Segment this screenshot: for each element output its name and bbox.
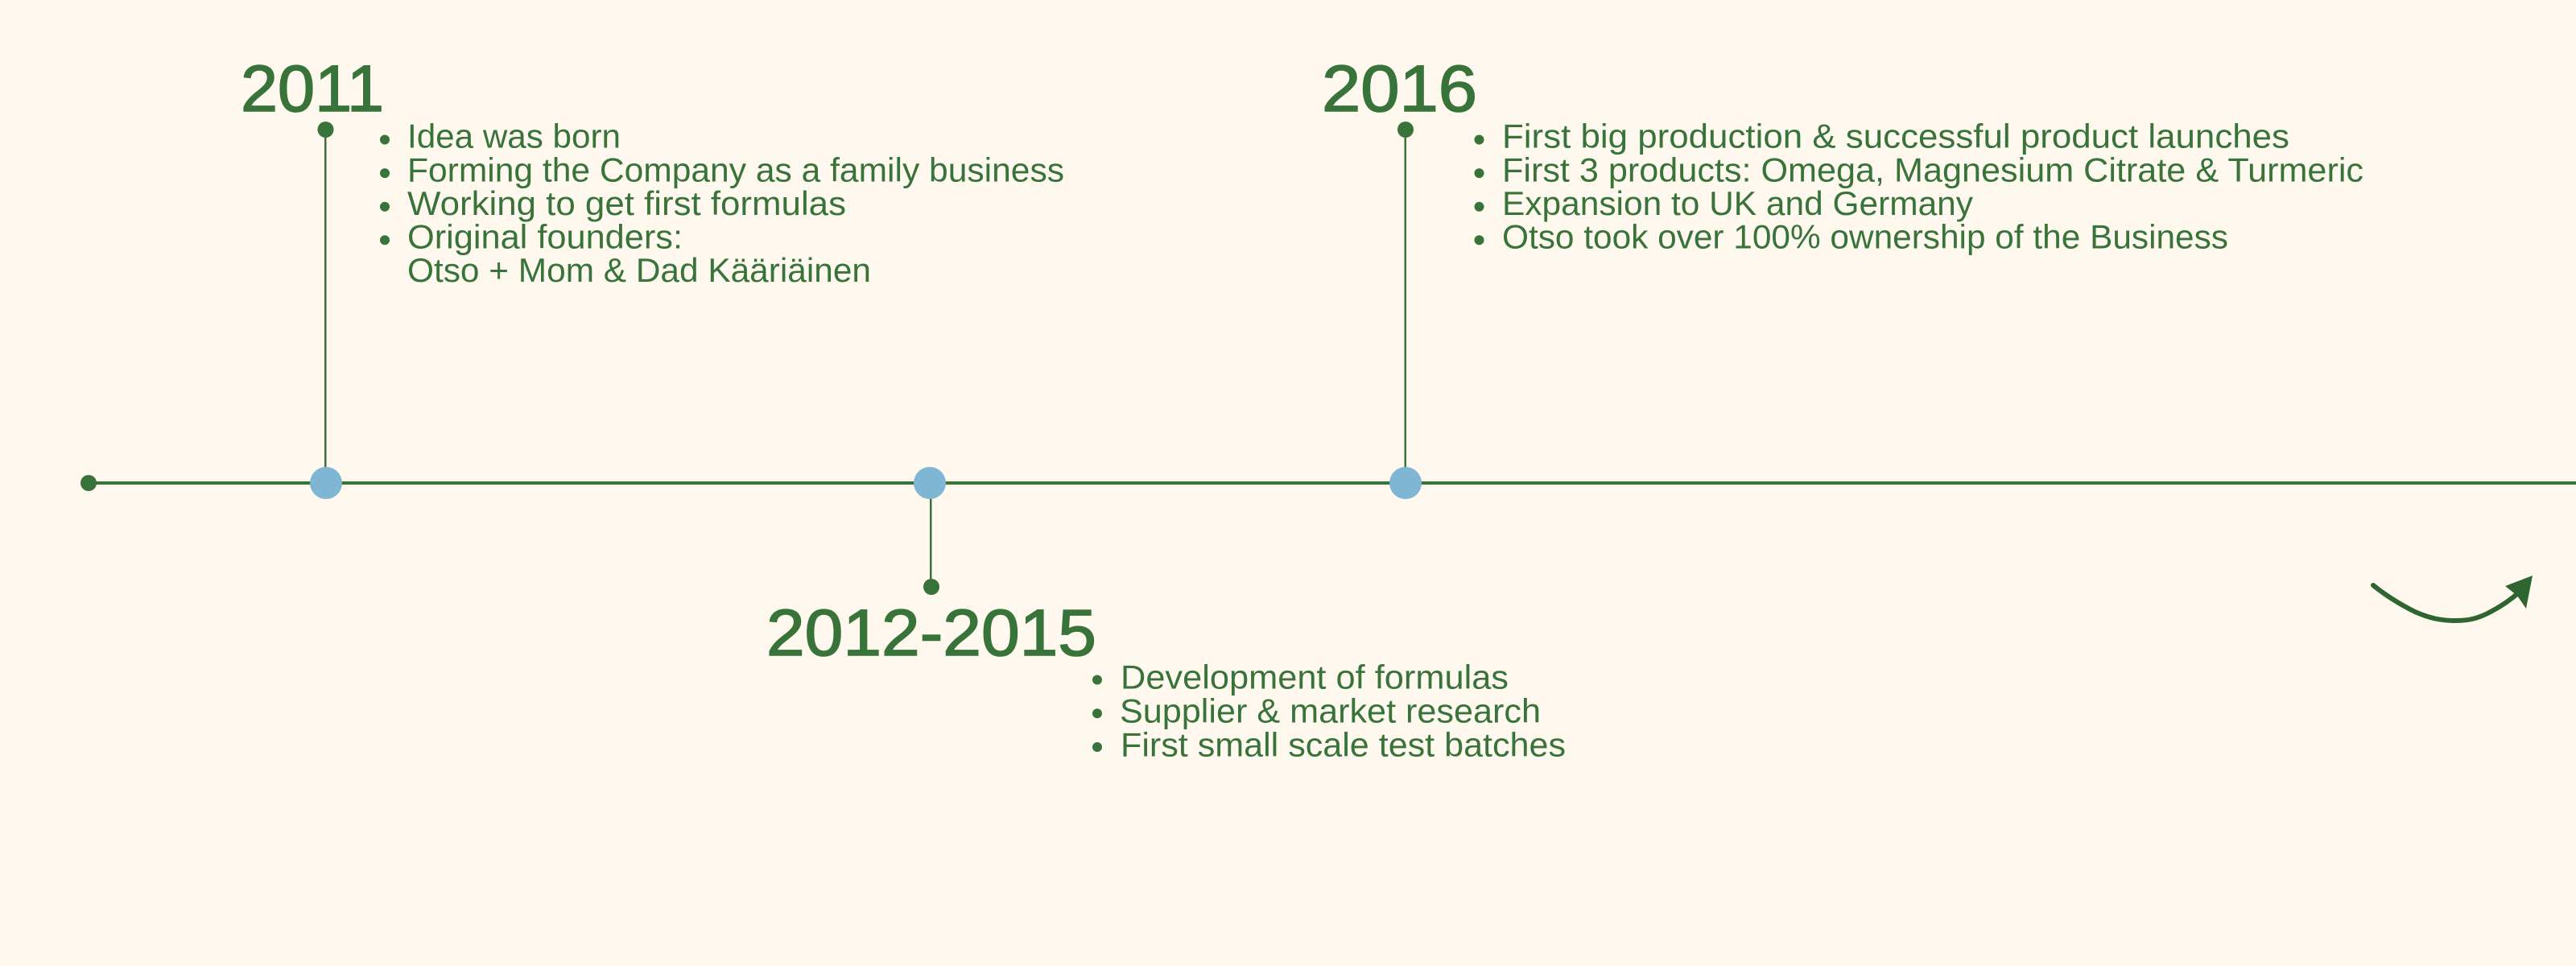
list 2016: First big production & successful product launches — [1502, 118, 2289, 155]
list 2011: Original founders: — [407, 218, 683, 256]
year 2016: 2016 — [1322, 52, 1477, 126]
year 2011: 2011 — [241, 52, 384, 126]
list 2011: Forming the Company as a family business — [407, 151, 1064, 188]
connector 2011 — [317, 122, 333, 483]
list 2012-2015: Supplier & market research — [1120, 691, 1541, 729]
timeline axis — [80, 475, 2576, 491]
milestone: 2016 — [1322, 52, 2363, 499]
milestone: 2012-2015 — [766, 467, 1566, 763]
list 2016: Expansion to UK and Germany — [1502, 184, 1973, 222]
list 2012-2015: First small scale test batches — [1121, 725, 1566, 763]
list 2012-2015: Development of formulas — [1121, 658, 1509, 696]
list 2012-2015 — [1092, 658, 1566, 763]
connector 2012-2015 — [923, 483, 939, 595]
node 2012-2015 — [914, 467, 946, 499]
list 2011 — [380, 118, 1064, 289]
node 2016 — [1389, 467, 1422, 499]
milestone: 2011 — [241, 52, 1064, 499]
list 2011: Otso + Mom & Dad Kääriäinen — [407, 251, 871, 289]
year 2012-2015: 2012-2015 — [766, 597, 1096, 670]
list 2011: Working to get first formulas — [407, 184, 846, 222]
list 2016 — [1475, 118, 2363, 256]
list 2011: Idea was born — [407, 118, 621, 155]
connector 2016 — [1397, 122, 1414, 483]
arrow — [2373, 576, 2533, 621]
list 2016: First 3 products: Omega, Magnesium Citrate & Turmeric — [1502, 151, 2363, 188]
node 2011 — [310, 467, 342, 499]
list 2016: Otso took over 100% ownership of the Business — [1502, 218, 2228, 256]
